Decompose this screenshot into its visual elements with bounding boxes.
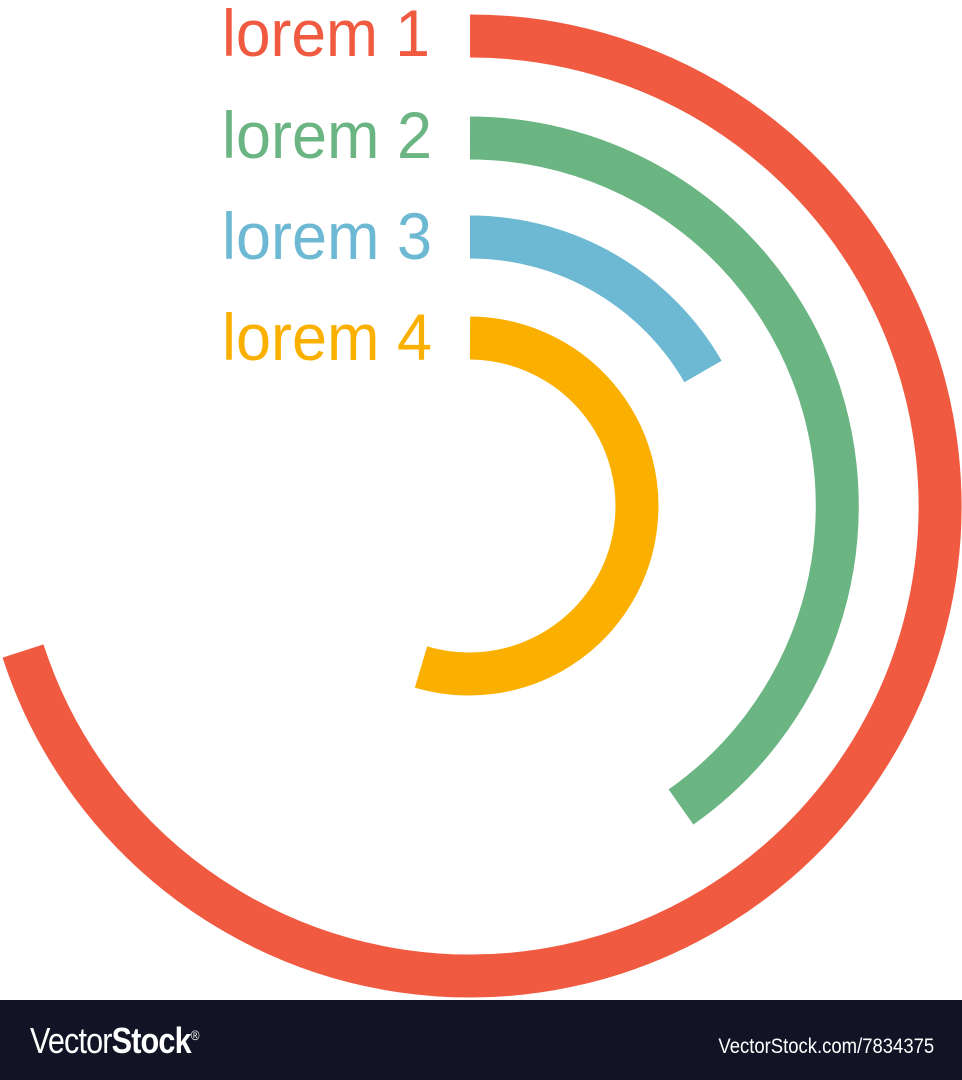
footer url: VectorStock.com/7834375 <box>718 1035 934 1058</box>
label: lorem 2: lorem 2 <box>222 98 432 172</box>
label: lorem 4: lorem 4 <box>222 300 432 374</box>
footer logo: VectorStock® <box>30 1020 199 1061</box>
arc: lorem 3 blue <box>470 237 703 372</box>
label: lorem 3: lorem 3 <box>222 199 432 273</box>
arc: lorem 2 green <box>470 138 837 807</box>
footer bar <box>0 1000 962 1080</box>
arc: lorem 4 yellow <box>421 338 637 674</box>
